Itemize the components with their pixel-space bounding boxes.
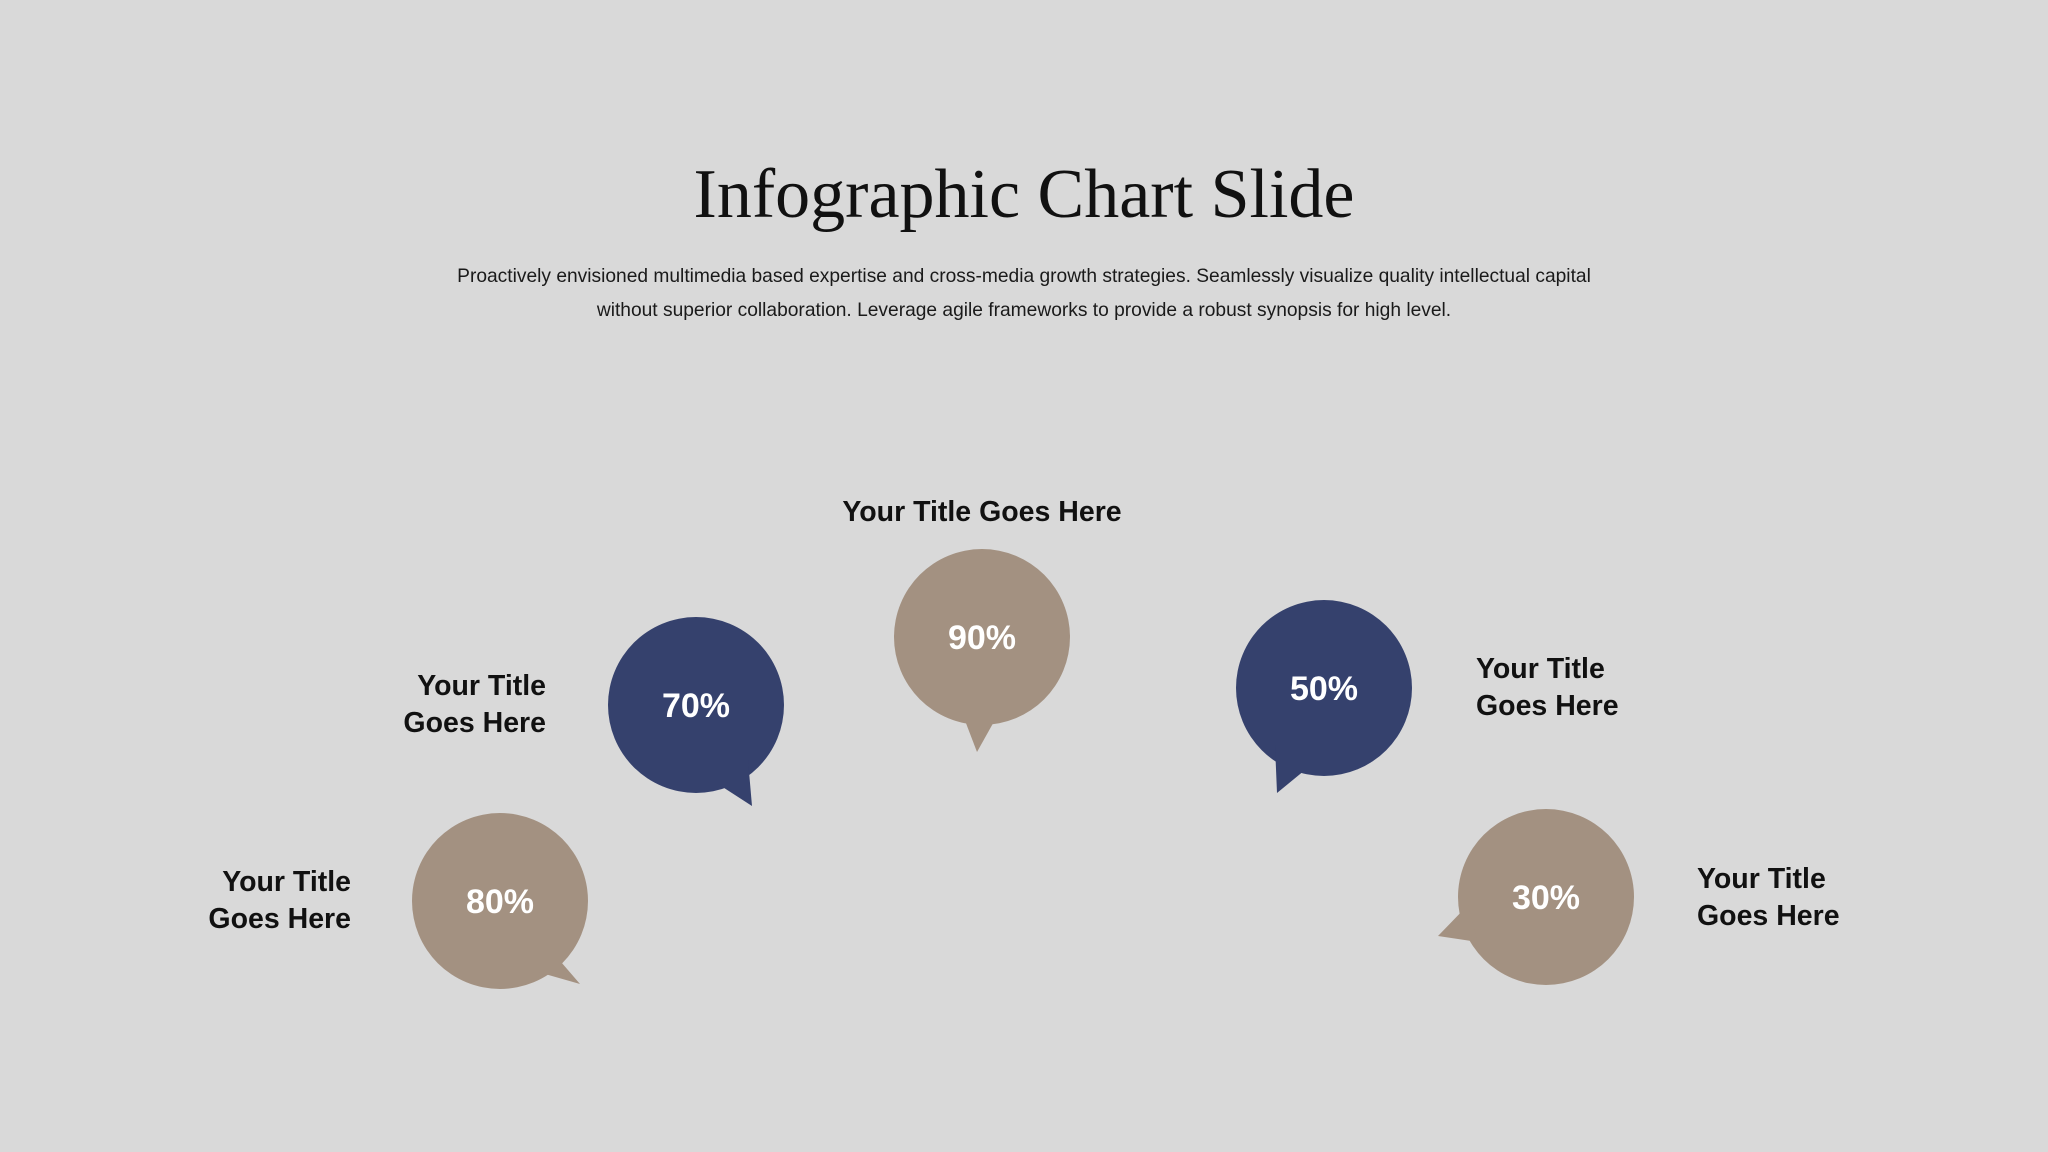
label: 80%: Your Title — [222, 866, 351, 898]
bubble: 80%: 80% — [466, 883, 534, 921]
bubble: 30%: 30% — [1512, 879, 1580, 917]
label: 50% — [1476, 653, 1619, 722]
subtitle text: without superior collaboration. Leverage agile frameworks to provide a robust synopsis for high level. — [597, 300, 1451, 321]
title: Infographic Chart Slide — [694, 156, 1354, 233]
label: 80%: Goes Here — [208, 903, 351, 935]
subtitle text — [457, 266, 1591, 321]
bubble: 30% — [1438, 809, 1634, 985]
bubble: 70%: 70% — [662, 687, 730, 725]
label: 70%: Goes Here — [403, 707, 546, 739]
subtitle text: Proactively envisioned multimedia based expertise and cross-media growth strategies. Seamlessly visualize quality intellectual capital — [457, 266, 1591, 287]
label: 70% — [403, 670, 546, 739]
label: 70%: Your Title — [417, 670, 546, 702]
bubble: 70% — [608, 617, 784, 806]
label: top: Your Title Goes Here — [842, 496, 1122, 528]
bubble: 50% — [1236, 600, 1412, 793]
label: 30%: Your Title — [1697, 863, 1826, 895]
label: 30%: Goes Here — [1697, 900, 1840, 932]
bubble: 80% — [412, 813, 588, 989]
label: 50%: Your Title — [1476, 653, 1605, 685]
bubble: 90% — [894, 549, 1070, 752]
bubble: 50%: 50% — [1290, 670, 1358, 708]
label: 30% — [1697, 863, 1840, 932]
label: 80% — [208, 866, 351, 935]
bubble: 90%: 90% — [948, 619, 1016, 657]
label: 50%: Goes Here — [1476, 690, 1619, 722]
